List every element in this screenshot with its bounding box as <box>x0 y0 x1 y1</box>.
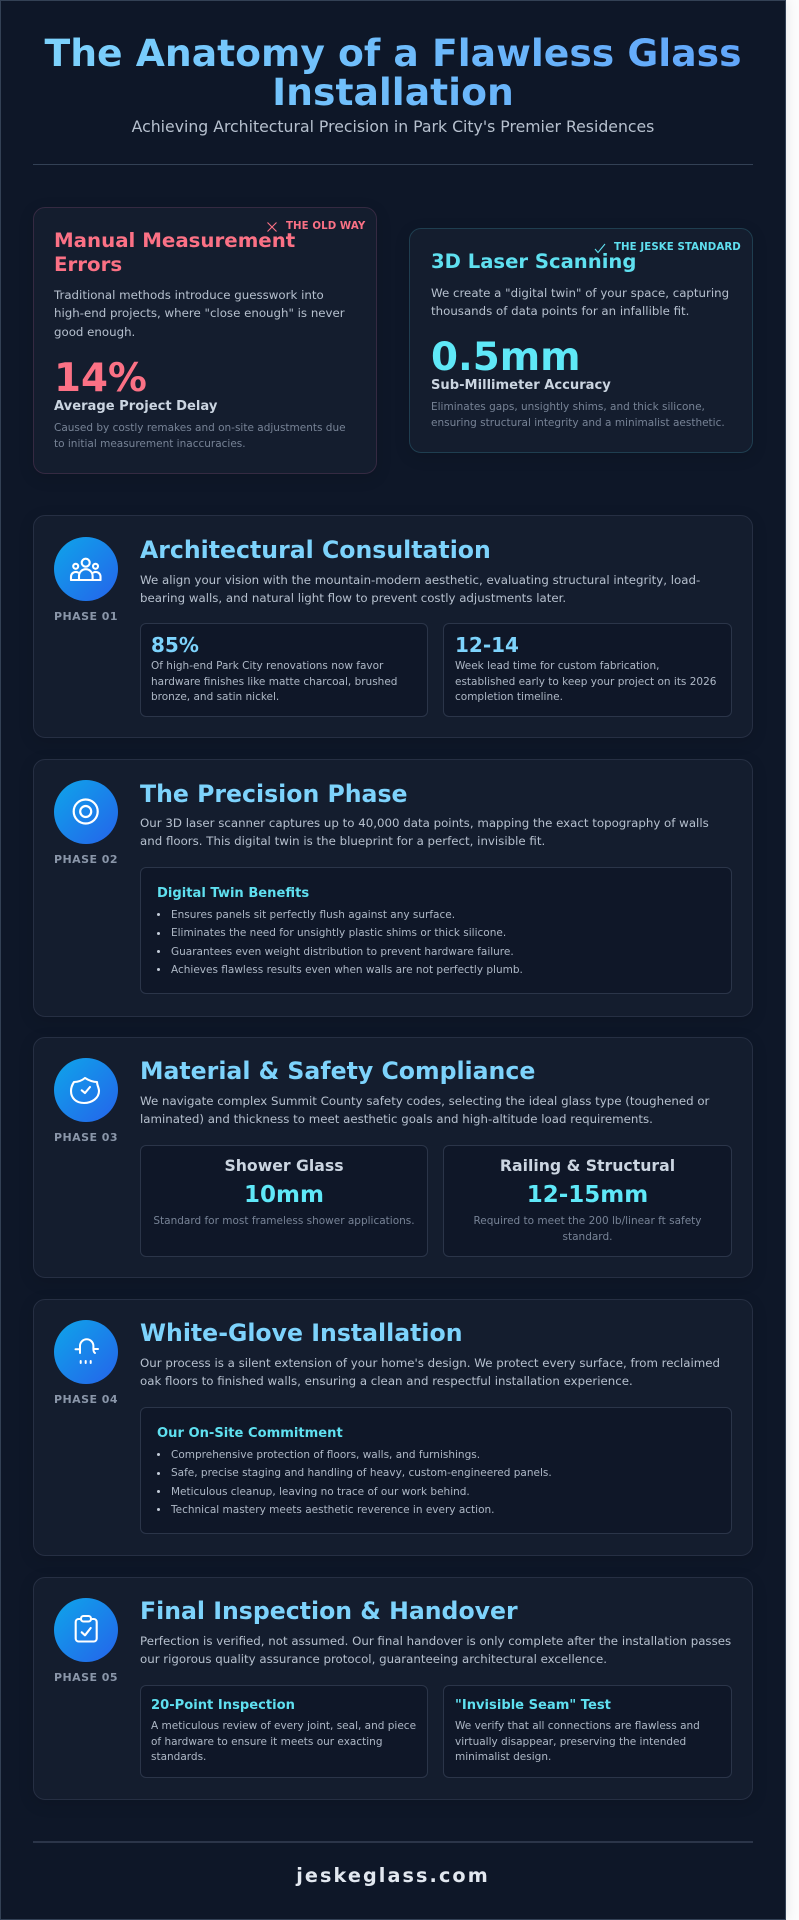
list heading: Digital Twin Benefits <box>157 886 309 901</box>
header <box>44 31 742 136</box>
phase description: bearing walls, and natural light flow to prevent costly adjustments later. <box>140 591 566 605</box>
card body: thousands of data points for an infallible fit. <box>431 304 689 318</box>
phase description <box>140 1356 720 1388</box>
card heading: Manual Measurement <box>54 229 295 252</box>
spec value: 10mm <box>244 1182 324 1208</box>
stat box: 12-14 <box>443 623 732 717</box>
detail heading: 20-Point Inspection <box>151 1698 295 1713</box>
icon: target scan <box>54 780 118 844</box>
detail text: We verify that all connections are flawless and <box>455 1720 700 1732</box>
benefit list: Ensures panels sit perfectly flush against any surface. <box>171 909 455 921</box>
list heading: Our On-Site Commitment <box>157 1426 343 1441</box>
phase description: We align your vision with the mountain-modern aesthetic, evaluating structural integrity, load- <box>140 573 700 587</box>
stat text: completion timeline. <box>455 691 563 703</box>
phase description: Perfection is verified, not assumed. Our final handover is only complete after the installation passes <box>140 1634 731 1648</box>
spec value: 12-15mm <box>527 1182 648 1208</box>
stat text: hardware finishes like matte charcoal, brushed <box>151 676 397 688</box>
phase label: PHASE 05 <box>54 1671 118 1684</box>
badge: the old way: THE OLD WAY <box>286 221 365 232</box>
phase label: PHASE 01 <box>54 610 118 623</box>
phase description: our rigorous quality assurance protocol, guaranteeing architectural excellence. <box>140 1652 607 1666</box>
phase description <box>140 1634 731 1666</box>
spec note <box>473 1215 702 1243</box>
phase description: We navigate complex Summit County safety codes, selecting the ideal glass type (toughened or <box>140 1094 709 1108</box>
phase description <box>140 573 700 605</box>
spec name: Shower Glass <box>224 1156 344 1175</box>
commitment list: Technical mastery meets aesthetic reverence in every action. <box>171 1504 495 1516</box>
footer: website: jeskeglass.com <box>296 1864 490 1887</box>
statistic note: Caused by costly remakes and on-site adjustments due <box>54 422 346 434</box>
stat text: bronze, and satin nickel. <box>151 691 279 703</box>
card heading: Errors <box>54 253 122 276</box>
phase description: Our 3D laser scanner captures up to 40,000 data points, mapping the exact topography of walls <box>140 816 709 830</box>
panel: phase 02 <box>33 759 753 1017</box>
statistic label: Average Project Delay <box>54 399 217 414</box>
detail text <box>151 1720 416 1763</box>
panel: phase 04 <box>33 1299 753 1556</box>
phase description: Our process is a silent extension of your home's design. We protect every surface, from reclaimed <box>140 1356 720 1370</box>
panel: the old way <box>33 207 377 474</box>
card heading <box>54 229 295 276</box>
icon: glove arch <box>54 1320 118 1384</box>
panel: phase 05 <box>33 1577 753 1800</box>
detail box: invisible seam test <box>443 1685 732 1778</box>
spec box: railing and structural <box>443 1145 732 1257</box>
phase description: and floors. This digital twin is the blueprint for a perfect, invisible fit. <box>140 834 545 848</box>
statistic note <box>431 401 725 429</box>
detail text: minimalist design. <box>455 1751 551 1763</box>
icon: clipboard check <box>54 1598 118 1662</box>
stat value: 85% <box>151 633 199 657</box>
stat text: Of high-end Park City renovations now favor <box>151 660 383 672</box>
stat text: Week lead time for custom fabrication, <box>455 660 659 672</box>
commitment list: Safe, precise staging and handling of heavy, custom-engineered panels. <box>171 1467 552 1479</box>
detail text: standards. <box>151 1751 206 1763</box>
icon: check <box>594 244 606 254</box>
stat text: established early to keep your project on its 2026 <box>455 676 716 688</box>
stat text <box>455 660 716 703</box>
benefit list: Guarantees even weight distribution to prevent hardware failure. <box>171 946 514 958</box>
panel: phase 03 <box>33 1037 753 1278</box>
card body: good enough. <box>54 325 135 339</box>
phase description: laminated) and thickness to meet aesthetic goals and high-altitude load requirements. <box>140 1112 653 1126</box>
phase description <box>140 1094 710 1126</box>
statistic note <box>54 422 346 450</box>
detail box: 20-point inspection <box>140 1685 428 1778</box>
detail text: of hardware to ensure it meets our exacting <box>151 1736 382 1748</box>
statistic note: ensuring structural integrity and a minimalist aesthetic. <box>431 417 725 429</box>
commitment list: Meticulous cleanup, leaving no trace of our work behind. <box>171 1486 470 1498</box>
benefit list: Eliminates the need for unsightly plastic shims or thick silicone. <box>171 927 506 939</box>
detail text <box>455 1720 700 1763</box>
statistic: 14%: 14% <box>54 356 147 401</box>
phase label: PHASE 04 <box>54 1393 118 1406</box>
stat text <box>151 660 397 703</box>
statistic: 0.5mm: 0.5mm <box>431 335 581 380</box>
icon: shield check <box>54 1058 118 1122</box>
icon: people group <box>54 537 118 601</box>
phase description <box>140 816 709 848</box>
stat value: 12-14 <box>455 633 519 657</box>
panel: phase 01 <box>33 515 753 738</box>
badge: the jeske standard: THE JESKE STANDARD <box>614 242 741 253</box>
icon: cross <box>267 222 277 232</box>
title: The Anatomy of a Flawless Glass <box>44 31 742 75</box>
phase heading: The Precision Phase <box>140 780 408 808</box>
card body <box>431 286 729 318</box>
spec box: shower glass <box>140 1145 428 1257</box>
spec note: Required to meet the 200 lb/linear ft safety <box>473 1215 702 1227</box>
phase heading: White-Glove Installation <box>140 1319 463 1347</box>
card body: Traditional methods introduce guesswork into <box>54 288 324 302</box>
spec note: Standard for most frameless shower applications. <box>153 1215 415 1227</box>
list box: on-site commitment <box>140 1407 732 1534</box>
statistic note: to initial measurement inaccuracies. <box>54 438 246 450</box>
card body <box>54 288 345 339</box>
title <box>33 34 753 112</box>
card heading: 3D Laser Scanning <box>431 250 636 273</box>
statistic note: Eliminates gaps, unsightly shims, and thick silicone, <box>431 401 705 413</box>
commitment list: Comprehensive protection of floors, walls, and furnishings. <box>171 1449 480 1461</box>
stat box: 85% <box>140 623 428 717</box>
benefit list: Achieves flawless results even when walls are not perfectly plumb. <box>171 964 523 976</box>
list box: digital twin benefits <box>140 867 732 994</box>
card body: high-end projects, where "close enough" is never <box>54 306 345 320</box>
phase heading: Architectural Consultation <box>140 536 491 564</box>
card body: We create a "digital twin" of your space, capturing <box>431 286 729 300</box>
phase heading: Final Inspection & Handover <box>140 1597 518 1625</box>
phase heading: Material & Safety Compliance <box>140 1057 535 1085</box>
panel: the jeske standard <box>409 228 753 453</box>
phase label: PHASE 02 <box>54 853 118 866</box>
subtitle: Achieving Architectural Precision in Park City's Premier Residences <box>132 117 654 136</box>
detail heading: "Invisible Seam" Test <box>455 1698 611 1713</box>
commitment list <box>170 1449 552 1516</box>
detail text: virtually disappear, preserving the intended <box>455 1736 686 1748</box>
spec note: standard. <box>563 1231 612 1243</box>
statistic label: Sub-Millimeter Accuracy <box>431 378 611 393</box>
phase label: PHASE 03 <box>54 1131 118 1144</box>
phase description: oak floors to finished walls, ensuring a clean and respectful installation experience. <box>140 1374 633 1388</box>
benefit list <box>171 909 523 976</box>
spec name: Railing & Structural <box>500 1156 675 1175</box>
title: Installation <box>272 70 514 114</box>
detail text: A meticulous review of every joint, seal, and piece <box>151 1720 416 1732</box>
